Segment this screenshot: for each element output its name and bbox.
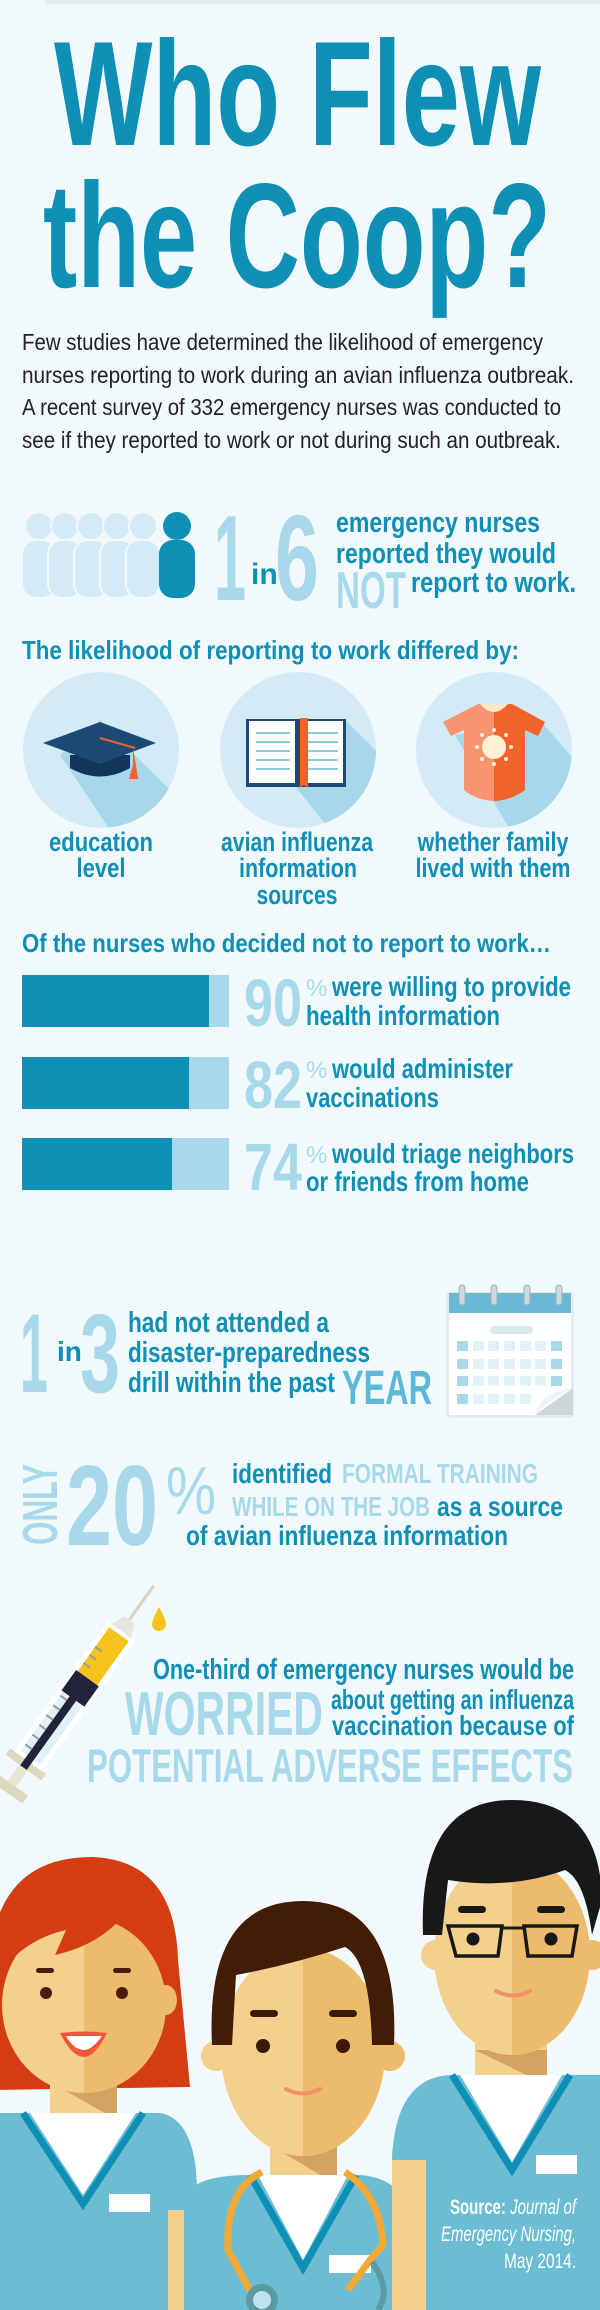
- stat: 1 in 3 drill: 1: [20, 1291, 48, 1416]
- icon: graduation cap: [23, 672, 179, 828]
- icon: baby onesie: [416, 672, 572, 828]
- stat: 1 in 6: 1: [214, 490, 246, 626]
- bar chart: 74%: or friends from home: [306, 1166, 529, 1197]
- callout: worried about vaccination: [87, 1654, 575, 1792]
- stat: 1 in 6: in: [251, 558, 278, 591]
- bar chart: 90%: [22, 966, 571, 1041]
- labels: three factors: [49, 827, 570, 910]
- bar chart: 74%: [22, 1130, 574, 1205]
- bar chart: 74%: 74: [244, 1130, 302, 1205]
- nurse: woman: [0, 1857, 205, 2310]
- source note: May 2014.: [504, 2250, 576, 2273]
- bar chart: 90%: health information: [306, 1000, 500, 1031]
- stat: 1 in 3 drill: 3: [80, 1291, 120, 1416]
- icon: people row: [22, 512, 195, 598]
- stat: only 20%: ONLY: [14, 1464, 68, 1545]
- illustration: nurses: [0, 1800, 600, 2310]
- stat: 1 in 3 drill: in: [57, 1336, 82, 1367]
- bar chart: 90%: %: [306, 975, 327, 1002]
- icon: syringe: [0, 1573, 172, 1805]
- labels: three factors: level: [76, 853, 126, 883]
- stat: only 20%: as a source: [437, 1491, 563, 1522]
- bar chart: 82%: 82: [244, 1048, 302, 1123]
- stat: only 20%: FORMAL TRAINING: [342, 1458, 538, 1489]
- stat: 1 in 3 drill: had not attended a: [128, 1307, 330, 1339]
- stat: only 20%: [14, 1443, 563, 1570]
- stat: only 20%: %: [166, 1453, 216, 1529]
- stat: only 20%: WHILE ON THE JOB: [232, 1491, 430, 1522]
- bar chart: 82%: [22, 1048, 513, 1123]
- bar chart: 82%: vaccinations: [306, 1082, 439, 1113]
- nurse: man with glasses: [392, 1800, 600, 2310]
- stat: only 20%: identified: [232, 1458, 332, 1489]
- source note: Source: Journal of: [450, 2196, 578, 2219]
- heading: likelihood differed by: The likelihood of reporting to work differed by:: [22, 635, 519, 665]
- stat: 1 in 3 drill: [20, 1291, 432, 1416]
- stat: only 20%: 20: [66, 1443, 158, 1570]
- stat: 1 in 3 drill: disaster-preparedness: [128, 1337, 370, 1369]
- labels: three factors: sources: [256, 880, 338, 910]
- labels: three factors: education: [49, 827, 153, 857]
- title: [43, 10, 551, 319]
- intro paragraph: [22, 329, 574, 453]
- stat: 1 in 6: emergency nurses: [336, 507, 540, 539]
- bar chart: 90%: 90: [244, 966, 302, 1041]
- icon: open book: [220, 672, 376, 828]
- stat: 1 in 6: 6: [275, 490, 319, 626]
- labels: three factors: avian influenza: [221, 827, 374, 857]
- intro paragraph: Few studies have determined the likelihood of emergency: [22, 329, 543, 355]
- bar chart: 82%: %: [306, 1057, 327, 1084]
- stat: 1 in 6: [214, 490, 576, 626]
- callout: worried about vaccination: WORRIED: [125, 1680, 323, 1749]
- source note: [441, 2196, 578, 2273]
- stat: 1 in 3 drill: YEAR: [342, 1362, 432, 1415]
- stat: 1 in 6: NOT: [336, 562, 406, 620]
- nurse: man with stethoscope: [168, 1901, 438, 2310]
- labels: three factors: information: [239, 853, 357, 883]
- icon: drop: [152, 1607, 166, 1631]
- stat: only 20%: of avian influenza information: [186, 1520, 508, 1551]
- icon: calendar: [446, 1285, 574, 1418]
- bar chart: 74%: %: [306, 1142, 327, 1169]
- bar chart: 82%: would administer: [331, 1053, 513, 1084]
- stat: 1 in 3 drill: drill within the past: [128, 1367, 335, 1399]
